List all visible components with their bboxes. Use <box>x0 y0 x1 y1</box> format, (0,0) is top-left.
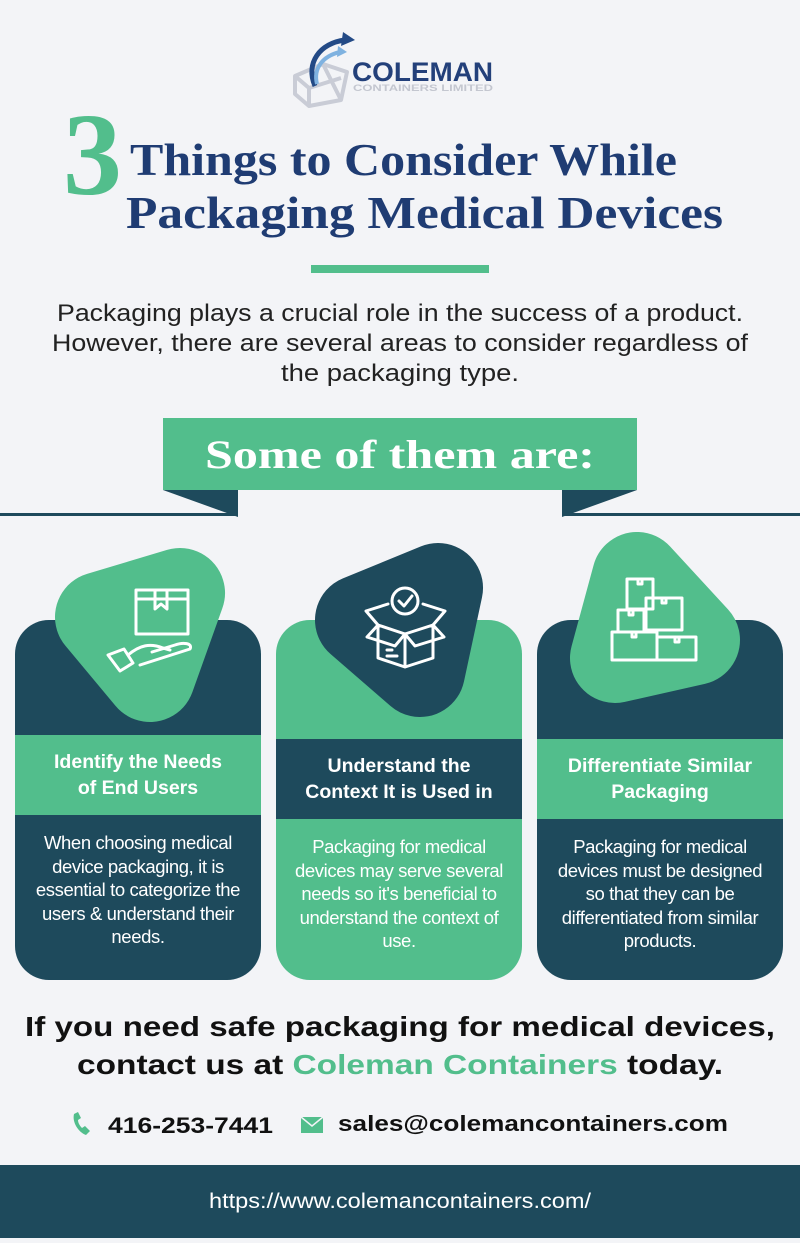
card 2 text <box>295 836 503 951</box>
call to action <box>25 1011 775 1080</box>
call to action: If you need safe packaging for medical devices, <box>25 1011 775 1042</box>
banner: some of them are: Some of them are: <box>205 432 595 477</box>
card 3 text: differentiated from similar <box>562 906 758 928</box>
icon: box with arrow <box>295 64 347 106</box>
icon: hand holding box <box>100 590 191 677</box>
logo: CONTAINERS LIMITED <box>353 83 494 93</box>
card 1 text: When choosing medical <box>44 832 232 853</box>
card 2 heading <box>276 739 522 819</box>
call to action: contact us at Coleman Containers today. <box>77 1049 723 1080</box>
card 2 text: Packaging for medical <box>312 836 486 857</box>
card 1 text: essential to categorize the <box>36 879 240 900</box>
card 3 heading: Differentiate Similar <box>568 755 752 777</box>
logo <box>293 32 494 108</box>
card 1 text: needs. <box>111 926 165 947</box>
title: Packaging Medical Devices <box>126 187 723 238</box>
contact row: sales@colemancontainers.com <box>338 1111 728 1136</box>
card 1 text: users & understand their <box>42 902 234 924</box>
card 3 text <box>558 836 762 951</box>
intro paragraph: the packaging type. <box>281 360 519 387</box>
icon: mail <box>301 1117 323 1133</box>
card 3 <box>537 620 783 980</box>
card 1 heading: Identify the Needs <box>54 751 222 773</box>
card 3 text: devices must be designed <box>558 860 762 880</box>
card 1 <box>15 620 261 980</box>
card 1 heading <box>15 735 261 815</box>
card 3 text: products. <box>624 930 696 951</box>
card 3 text: so that they can be <box>586 883 734 904</box>
icon: phone <box>74 1112 90 1135</box>
card 2 heading: Context It is Used in <box>305 781 493 803</box>
contact row <box>74 1111 728 1138</box>
card 3 heading: Packaging <box>611 781 709 803</box>
intro paragraph: However, there are several areas to consider regardless of <box>52 330 748 357</box>
card 2 <box>276 620 522 980</box>
card 2 text: devices may serve several <box>295 860 503 880</box>
banner: some of them are <box>0 418 800 517</box>
card 1 heading: of End Users <box>78 777 198 799</box>
title <box>63 100 723 238</box>
icon: open box with check <box>360 588 445 672</box>
icon: stacked boxes <box>612 577 696 660</box>
intro paragraph: Packaging plays a crucial role in the success of a product. <box>57 300 743 327</box>
card 2 text: needs so it's beneficial to <box>301 883 497 904</box>
footer <box>0 1165 800 1238</box>
contact row: 416-253-7441 <box>108 1113 273 1138</box>
card 3 text: Packaging for medical <box>573 836 747 857</box>
intro paragraph <box>52 300 748 387</box>
card 1 text: device packaging, it is <box>52 856 224 876</box>
title: Things to Consider While <box>130 134 677 185</box>
card 2 text: understand the context of <box>300 906 498 928</box>
blobs with icons <box>55 532 740 722</box>
card 3 heading <box>537 739 783 819</box>
card 1 text <box>36 832 240 947</box>
wordmark: COLEMAN <box>352 57 493 87</box>
footer: https://www.colemancontainers.com/ <box>209 1190 591 1213</box>
card 2 text: use. <box>382 930 416 951</box>
card 2 heading: Understand the <box>327 755 470 777</box>
